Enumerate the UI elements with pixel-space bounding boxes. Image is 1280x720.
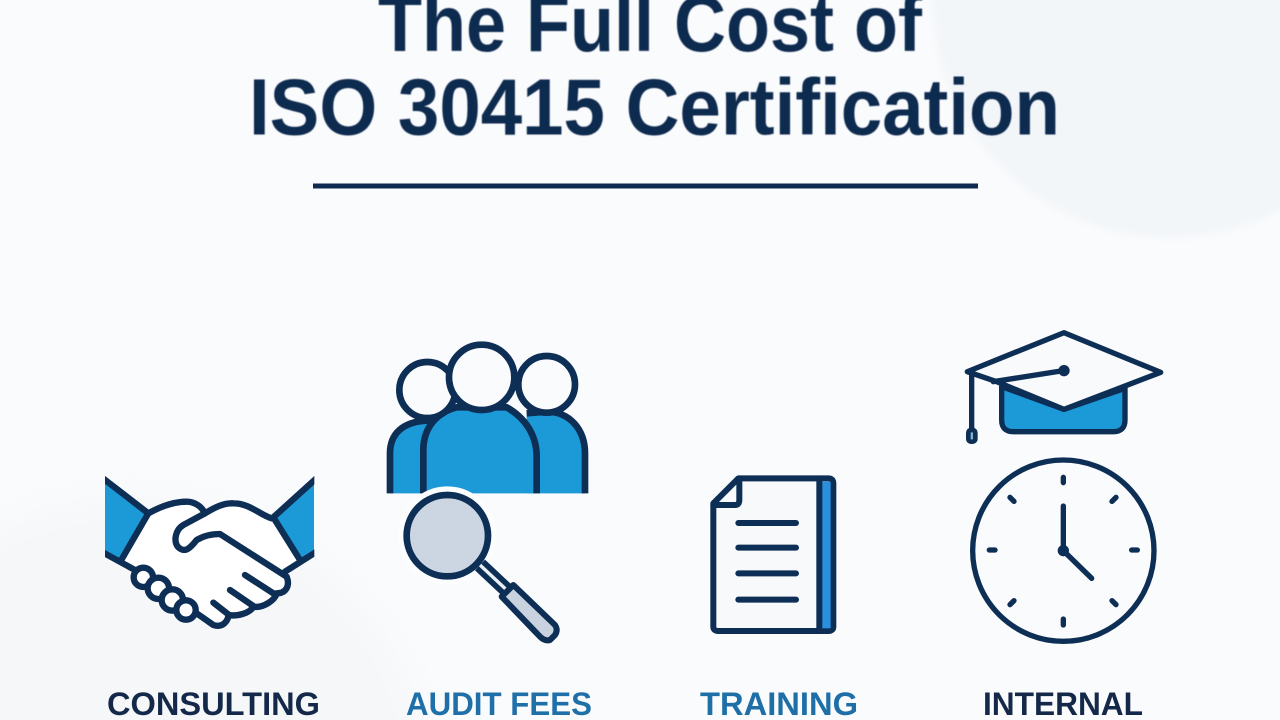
title [249, 0, 1060, 152]
column: consulting [103, 479, 320, 720]
icon: document [713, 478, 833, 631]
icon: clock [973, 460, 1154, 641]
icon: magnifying glass [398, 486, 557, 640]
icon: handshake [103, 479, 316, 626]
title: ISO 30415 Certification [249, 62, 1060, 152]
column: training [700, 478, 858, 720]
column: audit fees [390, 345, 592, 720]
icon: graduation cap [967, 333, 1161, 442]
column: internal [967, 333, 1161, 720]
icon: team of people [390, 345, 585, 493]
